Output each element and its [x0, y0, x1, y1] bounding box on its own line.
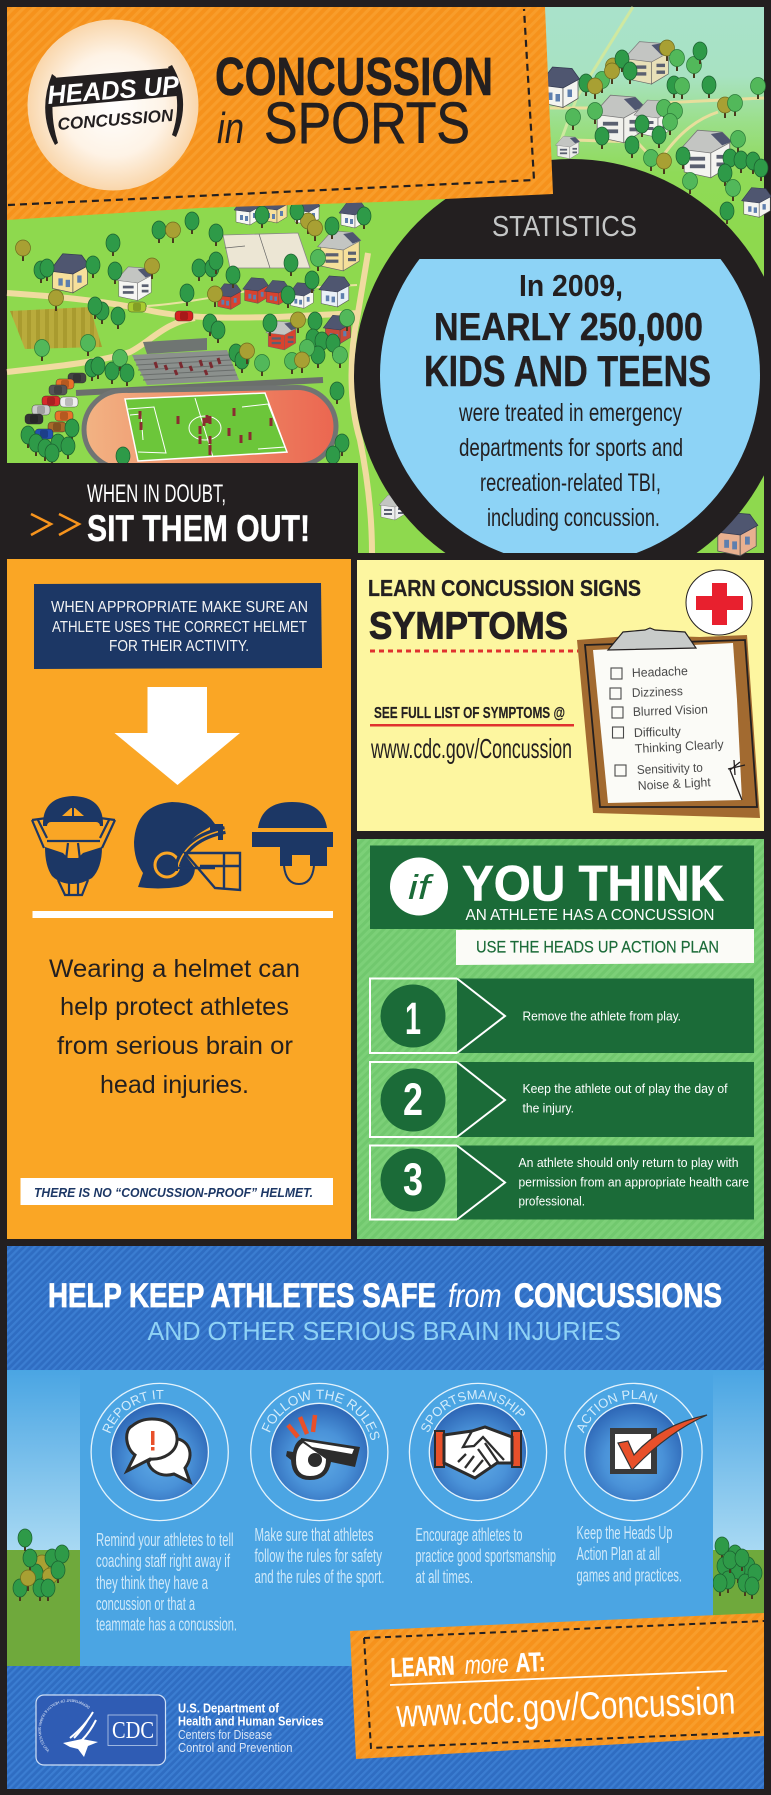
stat description: were treated in emergency: [458, 399, 682, 427]
helmet body text: Wearing a helmet can: [49, 955, 300, 983]
title: in sports: SPORTS: [264, 91, 470, 156]
step 2: Keep the athlete out of play the day of: [522, 1082, 728, 1096]
item: sportsmanship: [408, 1382, 556, 1587]
step 1: [370, 978, 754, 1053]
badge: if: if: [408, 869, 435, 907]
agency text: U.S. Department of: [178, 1702, 280, 1716]
link url: www.cdc.gov/Concussion: [370, 733, 572, 764]
badge: if: [390, 858, 448, 916]
title: in sports: in: [217, 104, 244, 153]
item: follow the rules: Make sure that athletes: [254, 1525, 374, 1545]
item: action plan: [564, 1382, 708, 1586]
agency text: [178, 1702, 324, 1755]
stat: nearly 250,000: NEARLY 250,000: [434, 306, 703, 349]
logo: heads up concussion: HEADS UP: [46, 70, 181, 110]
stat description: including concussion.: [487, 504, 660, 532]
icon: clipboard checklist: Headache: [632, 664, 688, 680]
icon: hhs eagle: [63, 1712, 98, 1757]
heading: help keep athletes safe: from: [448, 1277, 502, 1314]
item: report it: they think they have a: [96, 1573, 209, 1593]
link label: SEE FULL LIST OF SYMPTOMS @: [374, 705, 565, 722]
panel: symptoms: [357, 560, 764, 831]
step 2: [370, 1062, 754, 1137]
logo: heads up concussion: CONCUSSION: [57, 106, 175, 134]
title banner: [7, 7, 553, 220]
item: follow the rules: FOLLOW THE RULES: [262, 1390, 380, 1440]
step 2: the injury.: [522, 1102, 574, 1116]
panel: statistics circle: [354, 159, 764, 553]
header: YOU THINK: [462, 856, 724, 912]
item: sportsmanship: Encourage athletes to: [416, 1525, 522, 1545]
icon: catcher mask: [32, 796, 115, 895]
item: sportsmanship: practice good sportsmanship: [416, 1546, 556, 1566]
callout: when in doubt: WHEN IN DOUBT,: [87, 480, 226, 508]
item: report it: [90, 1382, 237, 1634]
note bar: THERE IS NO “CONCUSSION-PROOF” HELMET.: [34, 1185, 313, 1200]
logo: heads up concussion: [28, 20, 198, 190]
subheading: AND OTHER SERIOUS BRAIN INJURIES: [148, 1316, 621, 1346]
heading: symptoms: SYMPTOMS: [369, 606, 568, 648]
step 3: [370, 1146, 754, 1220]
step 3: permission from an appropriate health care: [518, 1176, 749, 1190]
item: report it: coaching staff right away if: [96, 1551, 231, 1571]
note bar: [20, 1178, 333, 1205]
icon: batting helmet: [252, 802, 333, 884]
instruction box: WHEN APPROPRIATE MAKE SURE AN: [51, 599, 308, 616]
banner: learn more: LEARN: [390, 1650, 455, 1683]
item: follow the rules: and the rules of the sport.: [254, 1567, 384, 1587]
stat: in 2009: In 2009,: [519, 268, 623, 303]
agency text: Health and Human Services: [178, 1714, 324, 1728]
helmet body text: head injuries.: [100, 1071, 249, 1099]
agency text: Centers for Disease: [178, 1728, 272, 1742]
heading: statistics: STATISTICS: [492, 211, 637, 243]
title: concussion: CONCUSSION: [215, 47, 493, 107]
instruction box: FOR THEIR ACTIVITY.: [109, 638, 249, 655]
callout: when in doubt: SIT THEM OUT!: [87, 508, 310, 549]
header: AN ATHLETE HAS A CONCUSSION: [466, 907, 714, 924]
icon: clipboard checklist: Difficulty: [634, 724, 682, 740]
instruction box: ATHLETE USES THE CORRECT HELMET: [52, 619, 307, 636]
step 2: 2: [403, 1074, 423, 1125]
banner: learn more: [350, 1613, 764, 1759]
item: follow the rules: [250, 1382, 389, 1587]
item: report it: REPORT IT: [102, 1390, 164, 1434]
item: report it: teammate has a concussion.: [96, 1614, 237, 1634]
icon: clipboard checklist: Noise & Light: [637, 775, 712, 793]
stat description: recreation-related TBI,: [480, 469, 661, 497]
icon: double chevron: [31, 514, 79, 535]
item: action plan: ACTION PLAN: [577, 1390, 658, 1434]
step 1: 1: [405, 993, 421, 1044]
icon: checkbox: [610, 1415, 707, 1474]
item: action plan: Action Plan at all: [576, 1544, 660, 1564]
heading: help keep athletes safe: CONCUSSIONS: [514, 1277, 722, 1315]
hhs seal ring text: DEPARTMENT OF HEALTH & HUMAN SERVICES USA: [38, 1699, 90, 1752]
item: action plan: Keep the Heads Up: [576, 1523, 672, 1543]
logo: hhs and cdc: [35, 1694, 166, 1766]
step 3: An athlete should only return to play with: [518, 1156, 739, 1170]
item: sportsmanship: at all times.: [416, 1567, 473, 1587]
helmet body text: help protect athletes: [60, 993, 289, 1021]
scenery: sky and grass strips: [7, 1370, 764, 1666]
icon: down arrow: [114, 687, 240, 785]
helmet body text: from serious brain or: [57, 1032, 293, 1060]
icon: clipboard checklist: Sensitivity to: [637, 761, 703, 777]
step 1: Remove the athlete from play.: [522, 1010, 681, 1024]
header: [370, 846, 754, 929]
icon: clipboard checklist: Thinking Clearly: [634, 737, 725, 756]
banner: use the plan: [456, 929, 754, 965]
icon: football helmet: [134, 802, 240, 890]
panel: village map illustration: [7, 7, 771, 556]
banner: use the plan: USE THE HEADS UP ACTION PLAN: [476, 938, 719, 956]
icon: speech bubbles: [127, 1419, 190, 1482]
banner: learn more: AT:: [515, 1647, 546, 1678]
item: follow the rules: follow the rules for safety: [254, 1546, 382, 1566]
panel: helmet: [7, 559, 351, 1239]
stat description: departments for sports and: [459, 434, 683, 462]
stat description: [458, 399, 683, 532]
panel: keep athletes safe: [7, 1246, 764, 1789]
icon: handshake: [435, 1427, 521, 1478]
panel: action plan: [357, 839, 764, 1239]
item: report it: concussion or that a: [96, 1594, 196, 1614]
step 3: professional.: [518, 1194, 585, 1208]
icon: whistle: [286, 1415, 360, 1480]
icon: clipboard checklist: Dizziness: [632, 684, 683, 700]
callout: when in doubt: [7, 463, 358, 553]
icon: clipboard checklist: [577, 628, 760, 818]
banner: learn more: more: [464, 1648, 509, 1680]
icon: clipboard checklist: Blurred Vision: [633, 702, 708, 719]
instruction box: [34, 583, 322, 669]
heading: learn signs: LEARN CONCUSSION SIGNS: [368, 575, 641, 601]
heading: help keep athletes safe: HELP KEEP ATHLETES SAFE: [48, 1277, 436, 1315]
cdc mark: CDC: [112, 1718, 154, 1744]
item: report it: Remind your athletes to tell: [96, 1530, 234, 1550]
item: sportsmanship: SPORTSMANSHIP: [421, 1390, 526, 1432]
item: action plan: games and practices.: [576, 1566, 682, 1586]
agency text: Control and Prevention: [178, 1741, 293, 1755]
step 3: 3: [403, 1154, 423, 1205]
helmet body text: [49, 955, 300, 1099]
icon: red cross: [686, 570, 752, 635]
